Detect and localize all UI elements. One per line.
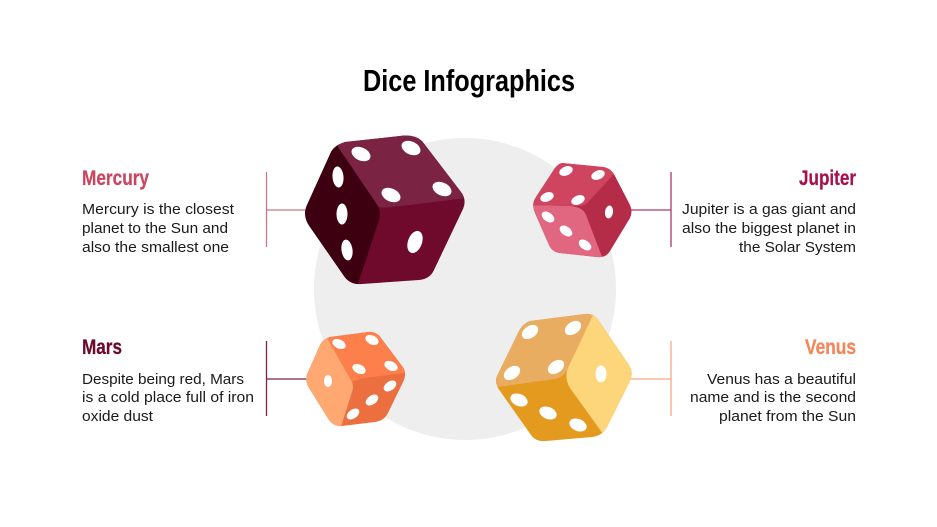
text block: Jupiter: also the biggest planet in — [682, 220, 856, 237]
heading: Mercury: Mercury — [82, 166, 149, 190]
icon: Mercury die — [305, 136, 465, 284]
text block: Mercury: Mercury is the closest — [82, 201, 235, 218]
connector: Jupiter — [628, 172, 671, 247]
heading: Mars: Mars — [82, 335, 122, 359]
text block: Venus: name and is the second — [690, 389, 856, 406]
icon: Venus die — [496, 314, 632, 442]
connector: Venus — [628, 341, 671, 416]
text block: Mercury: also the smallest one — [82, 239, 229, 256]
text block: Jupiter — [682, 201, 856, 256]
text block: Venus: planet from the Sun — [719, 408, 856, 425]
heading: Venus: Venus — [805, 335, 856, 359]
connector: Mercury — [266, 172, 312, 247]
text block: Venus — [690, 371, 856, 425]
heading: Jupiter: Jupiter — [799, 166, 856, 190]
icon: Mars die — [306, 332, 406, 426]
panel: Mercury — [82, 166, 235, 256]
connector: Mars — [266, 341, 310, 416]
text block: Jupiter: Jupiter is a gas giant and — [682, 201, 856, 218]
icon: Jupiter die — [533, 163, 632, 258]
text block: Mercury: planet to the Sun and — [82, 220, 228, 237]
panel: Mars — [82, 335, 254, 425]
text block: Jupiter: the Solar System — [739, 239, 856, 256]
title: Dice Infographics — [363, 63, 575, 98]
panel: Jupiter — [682, 166, 856, 256]
text block: Mercury — [82, 201, 235, 256]
text block: Mars: Despite being red, Mars — [82, 371, 244, 388]
text block: Mars: oxide dust — [82, 408, 154, 425]
background circle — [314, 138, 616, 440]
text block: Mars: is a cold place full of iron — [82, 389, 254, 406]
panel: Venus — [690, 335, 856, 425]
text block: Venus: Venus has a beautiful — [707, 371, 856, 388]
text block: Mars — [82, 371, 254, 425]
